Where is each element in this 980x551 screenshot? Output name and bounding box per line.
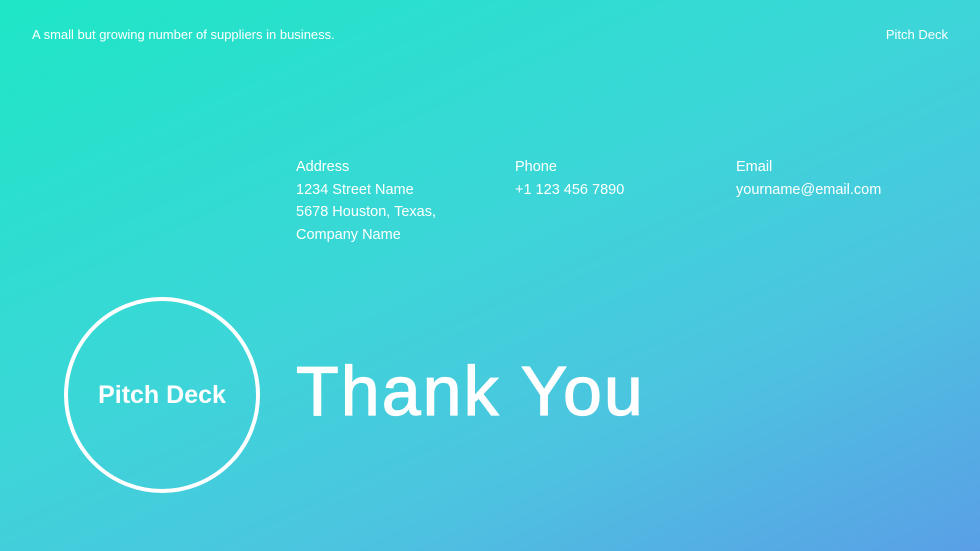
contact: address xyxy=(296,159,436,242)
main heading: Thank You xyxy=(296,352,645,430)
contact: email: yourname@email.com xyxy=(736,182,881,198)
contact: address: 5678 Houston, Texas, xyxy=(296,204,436,220)
header tagline: A small but growing number of suppliers in business. xyxy=(32,27,335,42)
contact: email: Email xyxy=(736,159,772,175)
contact: address: Address xyxy=(296,159,349,175)
header title: Pitch Deck xyxy=(886,27,948,42)
contact: address: 1234 Street Name xyxy=(296,182,414,198)
circle badge xyxy=(64,297,260,493)
circle badge: Pitch Deck xyxy=(98,380,226,408)
contact: phone xyxy=(515,159,624,198)
contact: email xyxy=(736,159,881,198)
contact: phone: +1 123 456 7890 xyxy=(515,182,624,198)
contact: phone: Phone xyxy=(515,159,557,175)
contact: address: Company Name xyxy=(296,226,401,242)
